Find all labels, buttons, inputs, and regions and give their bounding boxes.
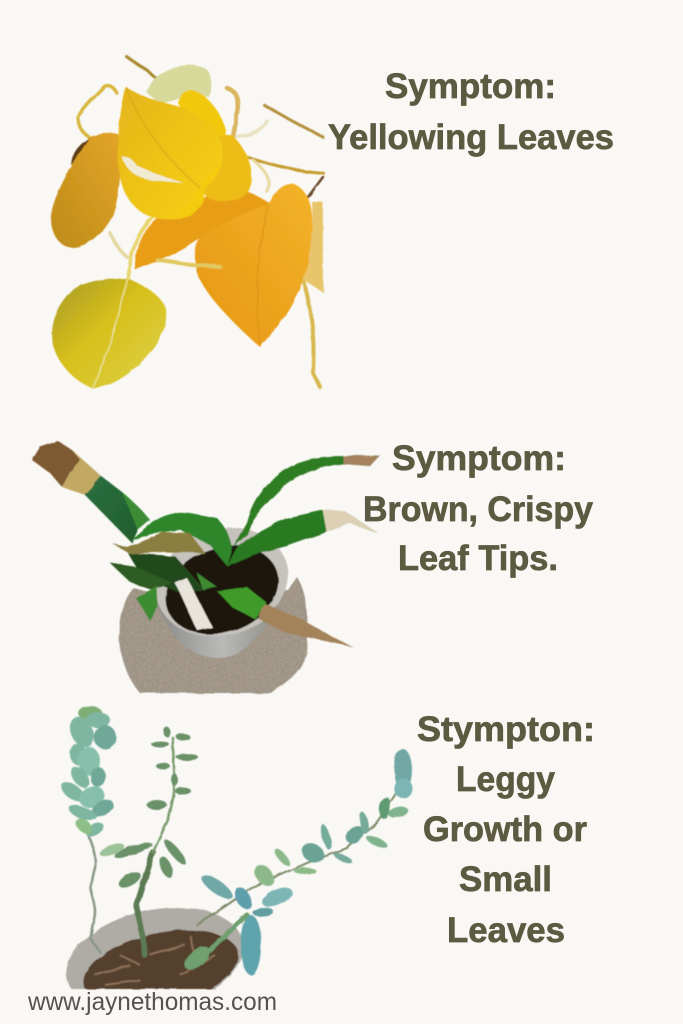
heading: yellowing leaves — [328, 67, 614, 157]
top-left leaf — [85, 475, 150, 543]
heading: brown crispy leaf tips: Symptom: — [392, 439, 566, 478]
back pale leaf — [147, 65, 211, 104]
dark leaf piece — [71, 136, 100, 165]
right top leaf — [233, 455, 380, 548]
heading: leggy growth: Leaves — [447, 911, 565, 950]
big front leaf — [118, 87, 223, 220]
heading: leggy growth: Stympton: — [417, 710, 595, 749]
white patch — [122, 157, 184, 183]
olive leaf — [112, 532, 205, 554]
right stem leaves — [180, 749, 412, 975]
center stems — [128, 217, 220, 278]
stems — [78, 57, 323, 387]
bottom leaf — [52, 278, 166, 388]
stems — [88, 738, 410, 955]
heading: brown crispy leaf tips: Leaf Tips. — [398, 539, 558, 578]
heading: leggy growth: Leggy — [456, 760, 556, 799]
left leaf — [51, 133, 121, 248]
left stem leaves — [58, 706, 126, 859]
photo: orchid with brown tips — [32, 441, 380, 693]
pot — [157, 570, 288, 658]
pot and soil — [65, 908, 242, 990]
bottom green leaf — [217, 587, 266, 619]
pale right leaf piece — [303, 202, 323, 292]
photo: yellowing pothos plant — [51, 57, 323, 388]
heading: brown crispy leaf tips — [363, 439, 594, 578]
soil — [153, 531, 291, 649]
website footer: www.jaynethomas.com — [27, 988, 277, 1016]
front lobe right — [200, 135, 252, 202]
middle stem leaves — [113, 727, 198, 891]
heading: leggy growth: Small — [459, 860, 552, 899]
panel: leggy growth — [60, 706, 592, 990]
panel: yellowing leaves — [51, 57, 614, 388]
heading: leggy growth — [417, 710, 595, 950]
heading: brown crispy leaf tips: Brown, Crispy — [363, 490, 594, 529]
granite saucer — [119, 577, 307, 693]
low dark leaf — [110, 563, 172, 590]
back yellow leaf — [178, 89, 226, 150]
center leaf — [132, 513, 232, 566]
brown leaf — [258, 603, 353, 647]
big orange leaf — [195, 184, 312, 347]
heading: yellowing leaves: Yellowing Leaves — [328, 118, 614, 157]
plant label tag — [175, 578, 212, 630]
heading: leggy growth: Growth or — [423, 810, 587, 849]
middle orange leaf — [135, 190, 272, 270]
right mid leaf — [227, 510, 378, 566]
heading: yellowing leaves: Symptom: — [385, 67, 556, 106]
panel: brown crispy leaf tips — [32, 439, 594, 693]
dark leaf mass — [128, 553, 205, 592]
small bright leaf — [136, 586, 158, 621]
photo: leggy succulent in pot — [60, 706, 414, 990]
